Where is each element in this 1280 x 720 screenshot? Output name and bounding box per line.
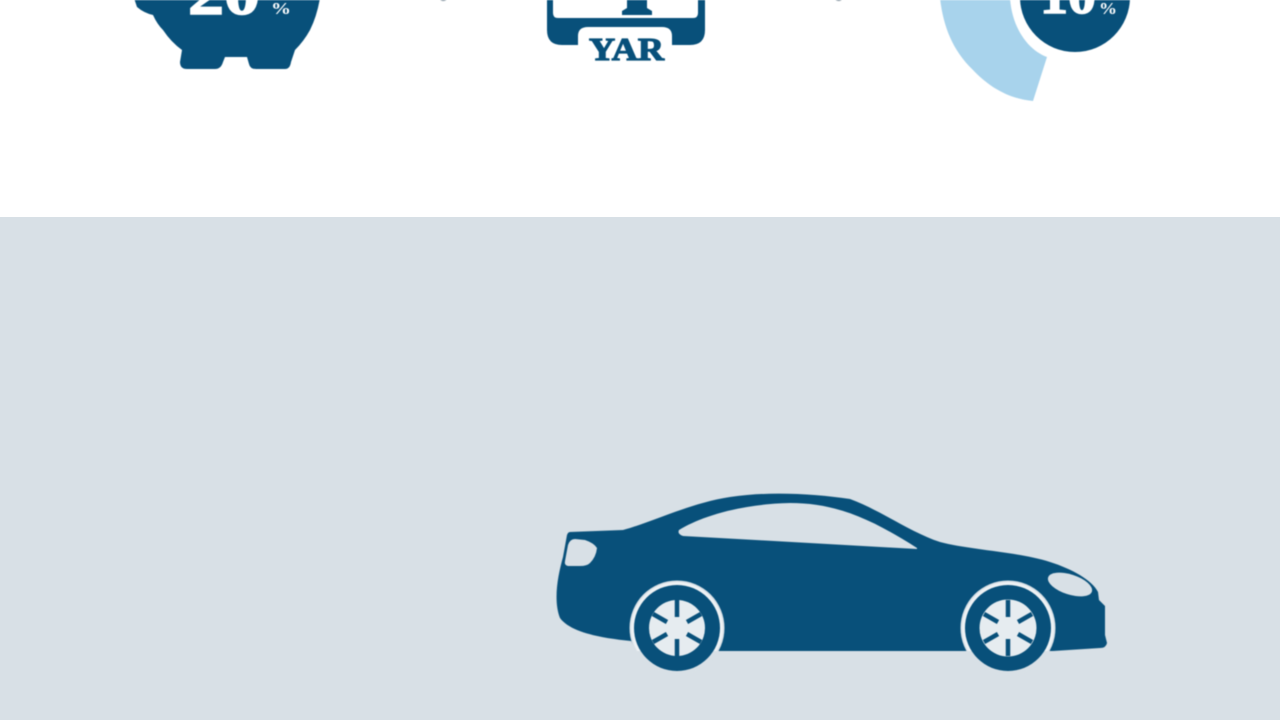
car window bbox=[678, 503, 917, 549]
car body bbox=[557, 494, 1107, 651]
monitor digit: 1 bbox=[622, 0, 652, 15]
rear wheel bbox=[630, 580, 724, 676]
icon: piggy bank with 20% bbox=[134, 0, 320, 69]
donut segment: light blue arc bbox=[940, 0, 1047, 101]
donut centre: dark circle bbox=[1020, 0, 1130, 52]
front wheel bbox=[960, 580, 1056, 676]
monitor label: YAR: YAR bbox=[589, 31, 665, 67]
icon: monitor with 1 YAR bbox=[547, 0, 705, 67]
chart: donut with 10% bbox=[940, 0, 1130, 101]
arrow: left connector tip bbox=[439, 0, 448, 1]
icon: car silhouette bbox=[557, 494, 1107, 676]
car tail light bbox=[565, 539, 597, 566]
car head light bbox=[1045, 568, 1095, 601]
panel: lower grey background bbox=[0, 217, 1280, 720]
arrow: right connector tip bbox=[834, 0, 843, 1]
